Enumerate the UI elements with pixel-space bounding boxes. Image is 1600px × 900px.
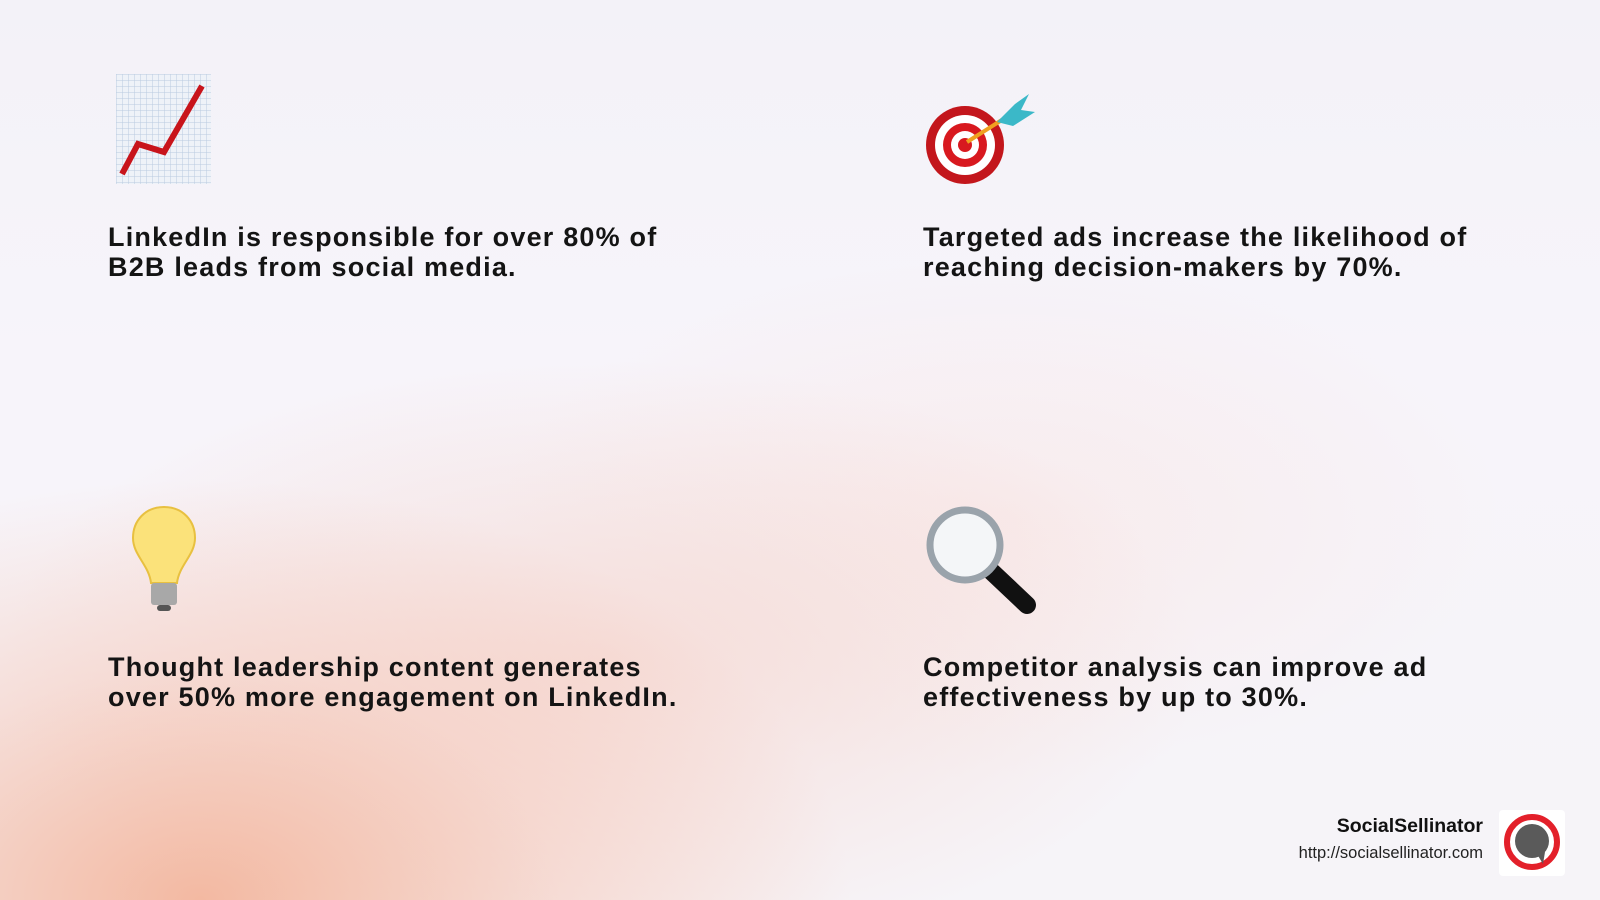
text: stat 1: B2B leads from social media. bbox=[108, 252, 517, 282]
text: stat 1: LinkedIn is responsible for over 80% of bbox=[108, 222, 657, 252]
text: stat 4 bbox=[923, 652, 1427, 712]
text: stat 3: over 50% more engagement on LinkedIn. bbox=[108, 682, 678, 712]
text: stat 2: reaching decision-makers by 70%. bbox=[923, 252, 1403, 282]
brand url: http://socialsellinator.com bbox=[1299, 844, 1483, 862]
icon: chart bbox=[116, 74, 211, 184]
icon: target bbox=[926, 94, 1035, 184]
text: stat 2: Targeted ads increase the likelihood of bbox=[923, 222, 1467, 252]
icon: magnifier bbox=[926, 506, 1036, 614]
text: stat 2 bbox=[923, 222, 1467, 282]
text: stat 3 bbox=[108, 652, 678, 712]
brand block bbox=[1299, 810, 1565, 876]
brand name: SocialSellinator bbox=[1337, 815, 1483, 837]
text: stat 4: effectiveness by up to 30%. bbox=[923, 682, 1308, 712]
text: stat 1 bbox=[108, 222, 657, 282]
logo bbox=[1499, 810, 1565, 876]
icon: light bulb bbox=[132, 506, 196, 611]
text: stat 3: Thought leadership content generates bbox=[108, 652, 642, 682]
text: stat 4: Competitor analysis can improve ad bbox=[923, 652, 1427, 682]
